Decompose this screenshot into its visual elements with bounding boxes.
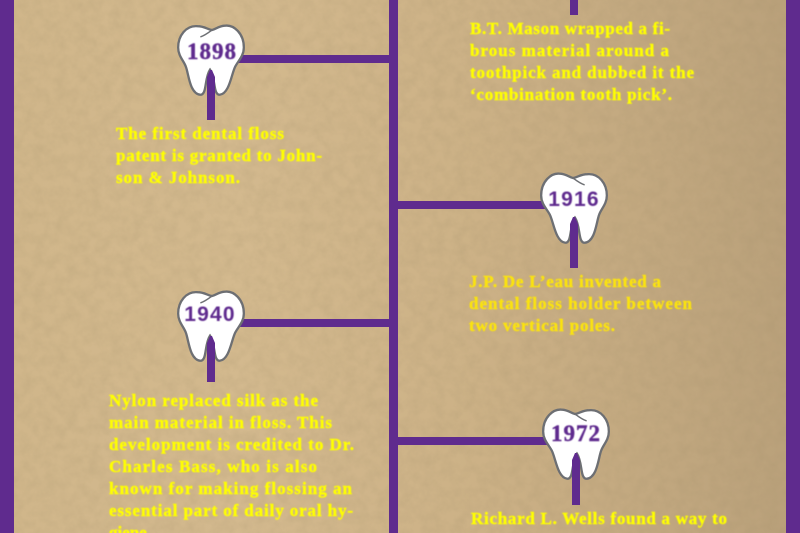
entry: top toothpick text: B.T. Mason wrapped a fi-: [470, 19, 670, 38]
tooth icon 1940: [178, 292, 244, 361]
stem 1972: [572, 453, 580, 505]
year 1898: 1898: [187, 39, 237, 64]
central timeline spine: [389, 0, 398, 533]
text 1940: known for making flossing an: [109, 479, 353, 498]
entry: top toothpick text: ‘combination tooth pick’.: [470, 85, 672, 104]
tooth icon 1972: [543, 410, 609, 479]
text 1940: main material in floss. This: [109, 413, 332, 432]
year 1972: 1972: [551, 421, 601, 446]
text 1972: Richard L. Wells found a way to: [471, 509, 727, 528]
text 1940: Nylon replaced silk as the: [109, 391, 318, 410]
stem 1898: [207, 70, 215, 120]
text 1916: dental floss holder between: [469, 294, 693, 313]
entry: 1972: [398, 410, 727, 528]
entry: top toothpick text: toothpick and dubbed it the: [470, 63, 694, 82]
text 1940: essential part of daily oral hy-: [109, 501, 353, 520]
text 1898: The first dental floss: [116, 124, 284, 143]
text 1916: two vertical poles.: [469, 316, 615, 335]
text 1916: J.P. De L’eau invented a: [469, 272, 662, 291]
entry: top toothpick text: brous material around a: [470, 41, 670, 60]
year 1940: 1940: [184, 303, 236, 326]
year 1916: 1916: [548, 188, 600, 211]
text 1940: development is credited to Dr.: [109, 435, 354, 454]
right purple border: [786, 0, 800, 533]
connector 1940: [235, 319, 389, 327]
stem 1916: [570, 217, 578, 268]
tooth icon 1898: [178, 26, 244, 95]
text 1898: son & Johnson.: [116, 168, 240, 187]
stem 1940: [207, 336, 215, 382]
entry: 1916: [398, 174, 697, 335]
connector 1898: [235, 55, 389, 63]
connector 1916: [398, 201, 546, 209]
text 1940: Charles Bass, who is also: [109, 457, 317, 476]
connector 1972: [398, 437, 548, 445]
entry: 1940: [109, 292, 389, 533]
left purple border: [0, 0, 14, 533]
top stem connector: [570, 0, 578, 15]
text 1898: patent is granted to John-: [116, 146, 322, 165]
tooth icon 1916: [541, 174, 607, 243]
entry: 1898: [116, 26, 389, 187]
